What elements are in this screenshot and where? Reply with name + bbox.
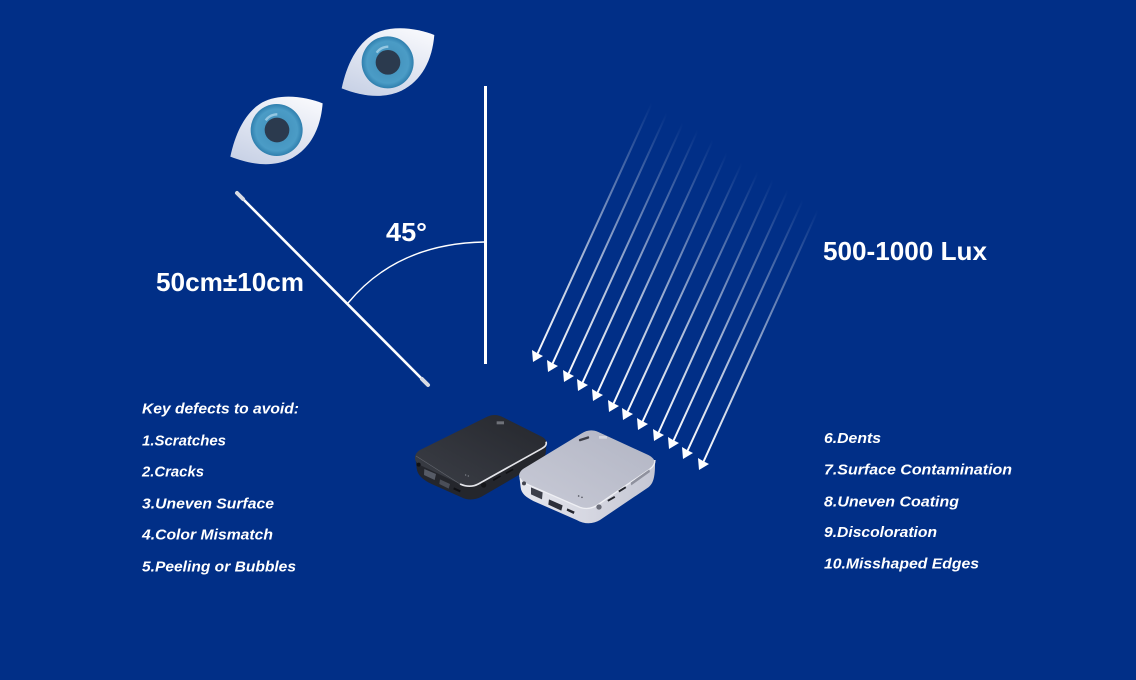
text block: key defects 6 to 10: 9.Discoloration	[824, 524, 937, 541]
device: black unit	[415, 415, 546, 500]
text block: key defects 6 to 10: 7.Surface Contamination	[824, 462, 1012, 478]
label: illuminance: 500-1000 Lux	[823, 236, 988, 266]
light ray arrows	[532, 103, 818, 470]
label: distance: 50cm±10cm	[156, 267, 304, 297]
text block: key defects 1 to 5: Key defects to avoid:	[142, 400, 299, 418]
text block: key defects 1 to 5: 4.Color Mismatch	[141, 526, 273, 544]
text block: key defects 6 to 10	[824, 430, 1012, 572]
text block: key defects 6 to 10: 8.Uneven Coating	[824, 494, 959, 510]
vertical reference line	[484, 86, 487, 364]
icon: lower eye	[230, 97, 323, 164]
text block: key defects 1 to 5: 1.Scratches	[142, 432, 226, 450]
icon: upper eye	[342, 28, 434, 96]
angle arc	[348, 242, 484, 303]
label: angle: 45°	[386, 217, 427, 247]
text block: key defects 1 to 5	[141, 400, 299, 576]
text block: key defects 6 to 10: 10.Misshaped Edges	[824, 556, 979, 572]
text block: key defects 1 to 5: 2.Cracks	[141, 464, 204, 480]
viewing distance line	[237, 193, 428, 385]
text block: key defects 6 to 10: 6.Dents	[824, 430, 881, 447]
text block: key defects 1 to 5: 5.Peeling or Bubbles	[142, 558, 296, 576]
text block: key defects 1 to 5: 3.Uneven Surface	[142, 496, 274, 512]
device: silver unit	[519, 430, 655, 523]
